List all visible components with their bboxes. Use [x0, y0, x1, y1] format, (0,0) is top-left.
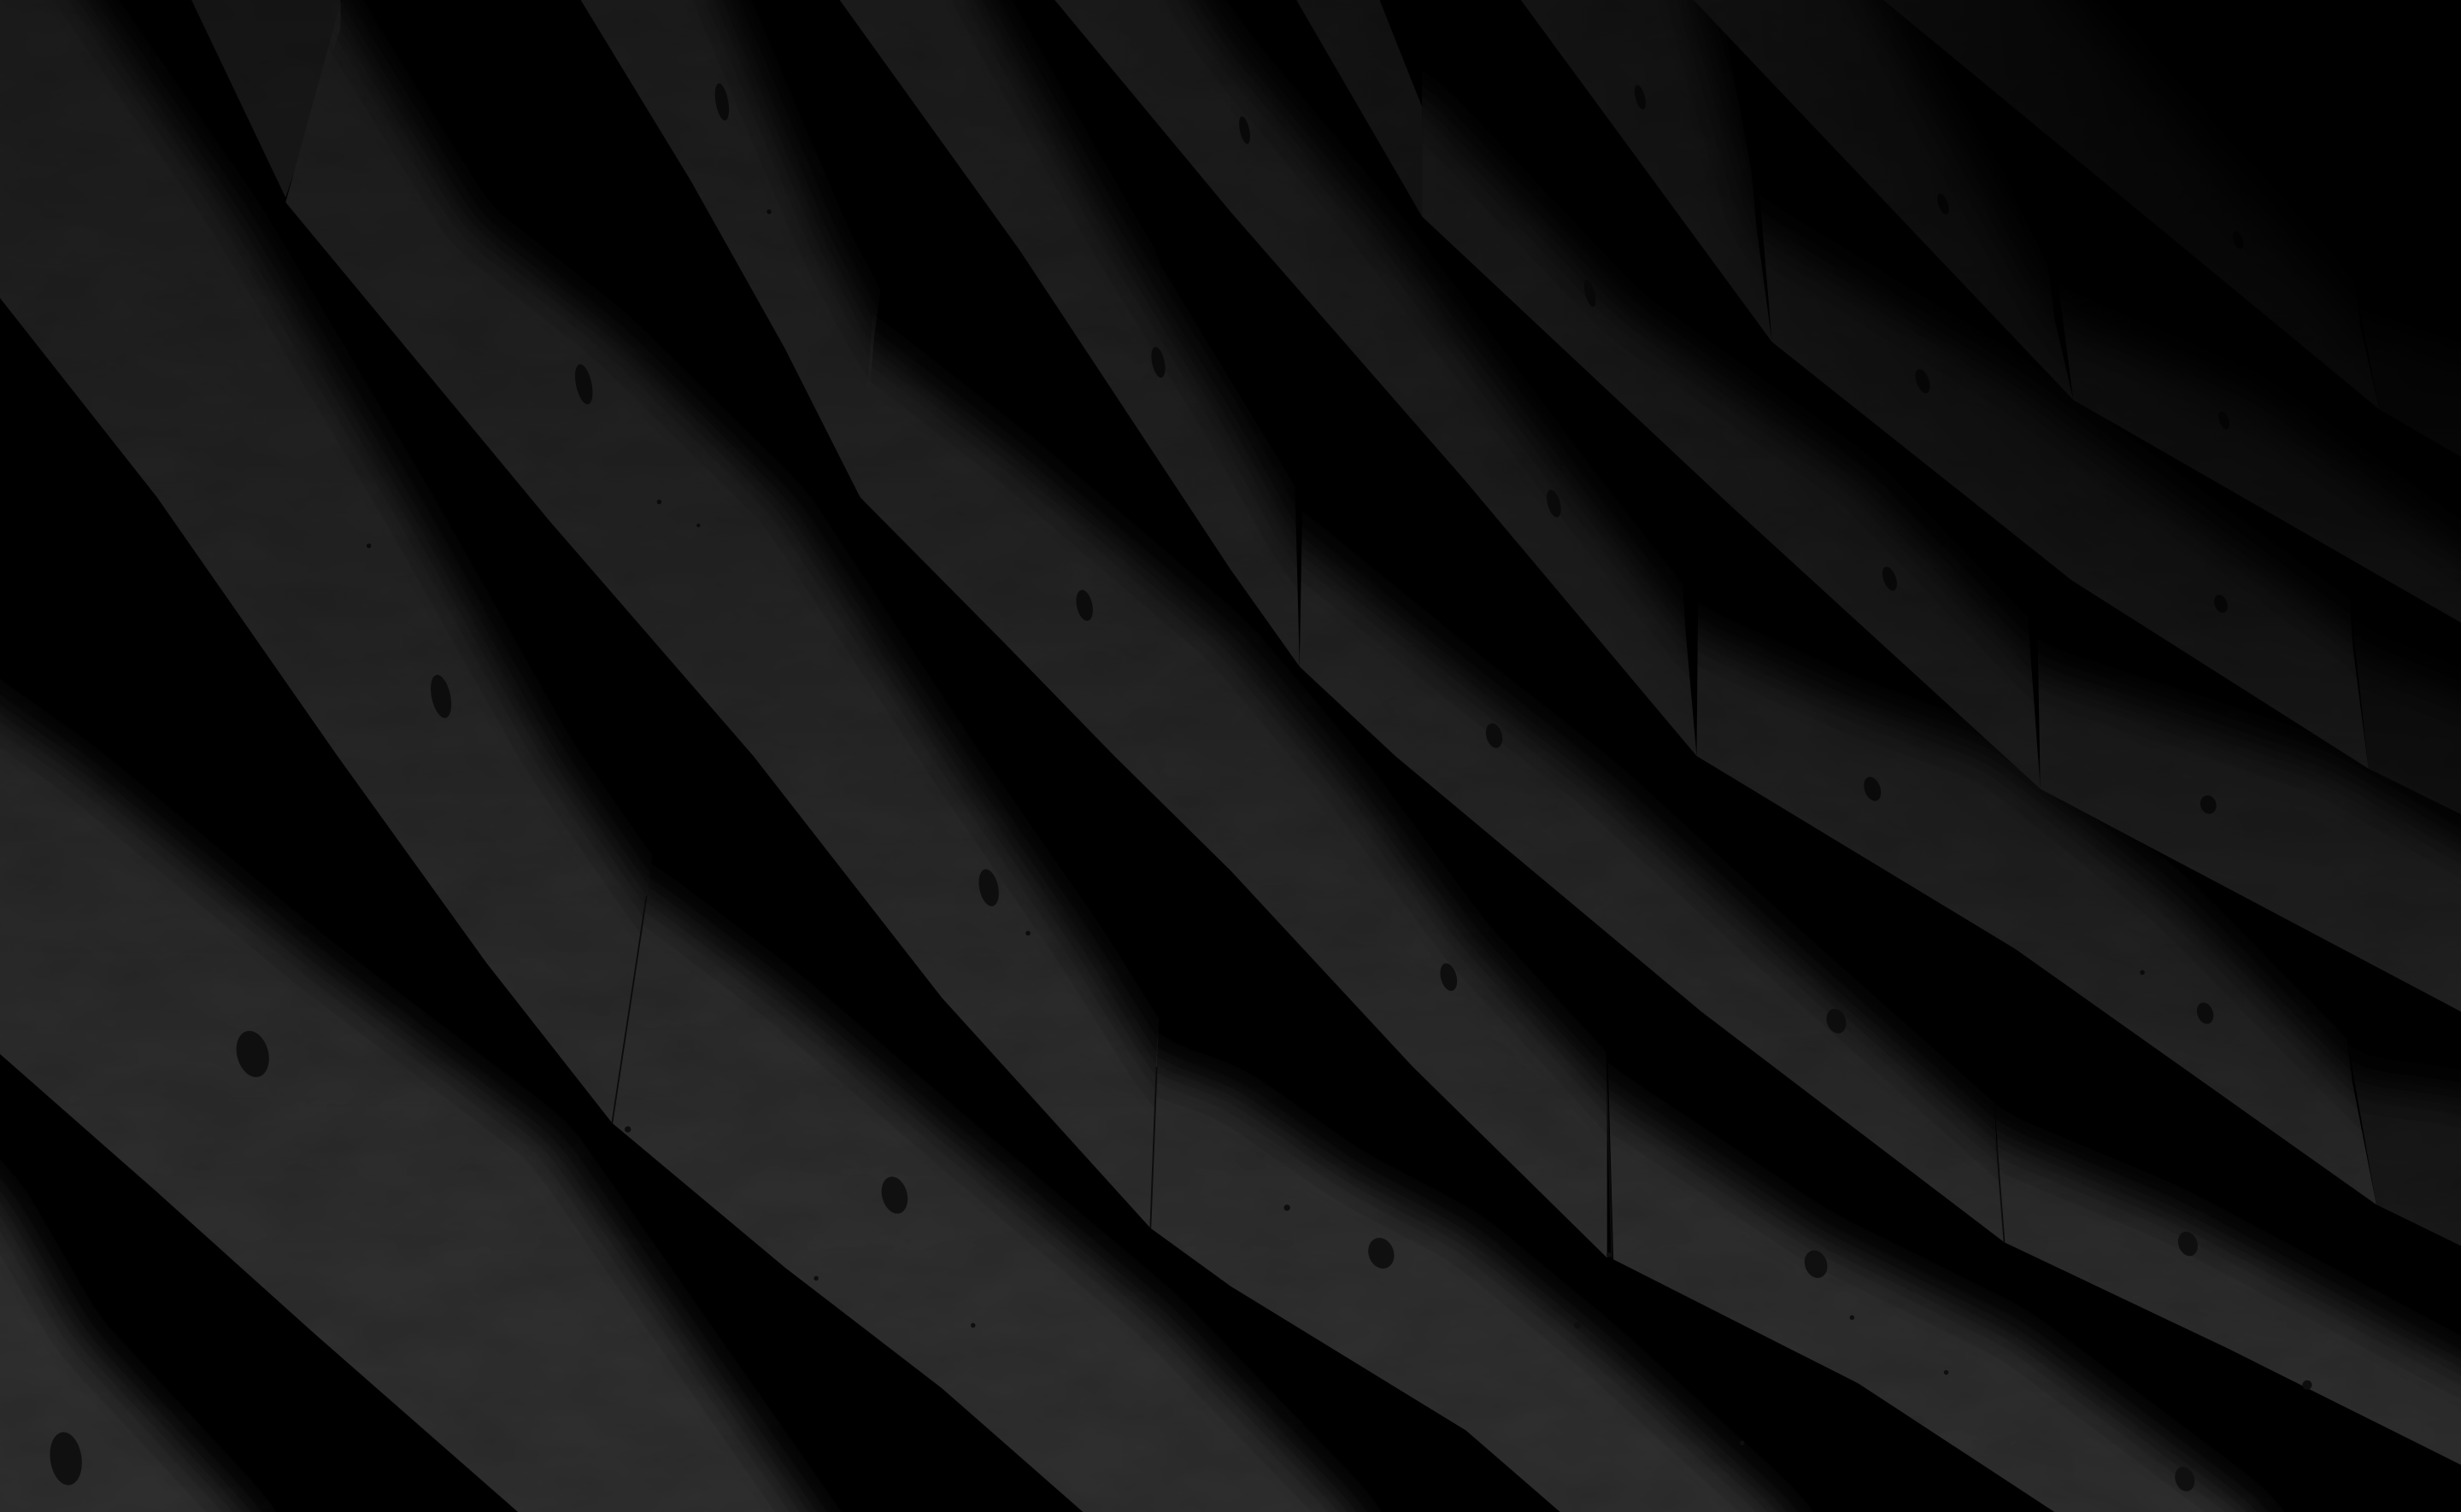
- beam 3, upper section: [581, 0, 877, 497]
- beam 5, middle section: [1617, 580, 2448, 1302]
- beam 5, upper section: [1054, 0, 1697, 756]
- beam 8, lower section: [1977, 267, 2461, 753]
- beam 6, middle section: [1334, 47, 2119, 894]
- beam 4, upper section: [839, 0, 1300, 666]
- beam 1, upper section: [0, 0, 649, 1122]
- beam 3, lower section: [1608, 1079, 2268, 1512]
- large lower-left beam: [0, 694, 827, 1512]
- beam 2, lower section: [1150, 1047, 1798, 1512]
- beam 6, top facet: [1296, 0, 1422, 216]
- beam 2, top facet: [191, 0, 341, 197]
- beam 2, middle section: [285, 2, 1158, 1227]
- beam 7, right end: [2276, 604, 2461, 941]
- beam 4, middle section: [1300, 530, 2003, 1242]
- beam 9, right end: [2292, 298, 2461, 565]
- small surface pits: [367, 209, 2312, 1445]
- beam 3, middle section: [860, 334, 1607, 1257]
- beam 8, upper section: [1632, 0, 2135, 486]
- beam 6, lower section: [1947, 612, 2461, 1129]
- beam 7, middle section: [1679, 173, 2448, 863]
- beam 9, upper section: [1821, 0, 2433, 502]
- beam 1, lower section: [612, 878, 1367, 1512]
- beam 7, upper section: [1460, 0, 1836, 439]
- bottom-left corner beam: [0, 941, 314, 1459]
- beam 4, lower section: [1996, 1120, 2461, 1465]
- beam 5, right end: [2292, 1035, 2461, 1333]
